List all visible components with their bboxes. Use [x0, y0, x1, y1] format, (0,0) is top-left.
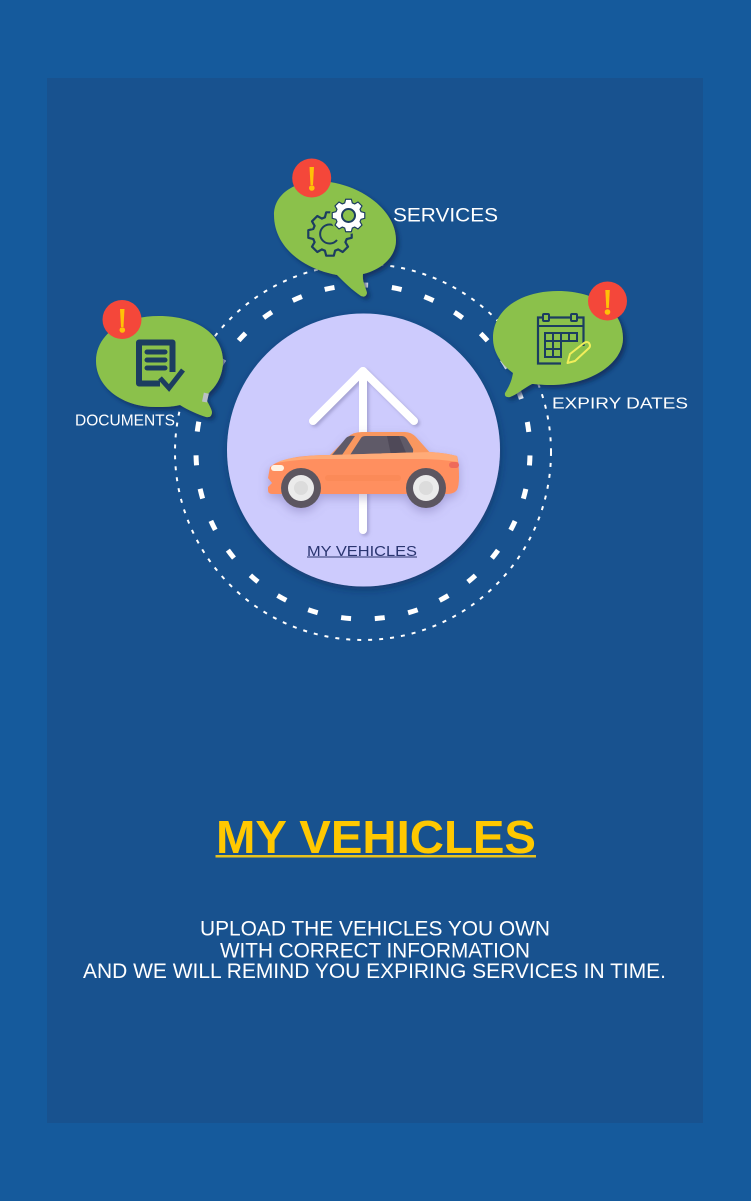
alert badge: [588, 282, 627, 320]
label: expiry dates: EXPIRY DATES: [552, 396, 688, 412]
label: my vehicles small: MY VEHICLES: [307, 544, 417, 560]
alert badge: [102, 300, 142, 339]
small grey fragment: [202, 393, 209, 403]
dotted outer ring: [175, 264, 551, 640]
central circle: my vehicles: [227, 314, 500, 586]
bubble: services: [274, 158, 396, 297]
rear wheel: [406, 468, 446, 508]
icon: upward arrow: [313, 371, 414, 530]
icon: document with check: [139, 342, 183, 388]
front wheel: [281, 468, 321, 508]
bubble: expiry dates: [493, 282, 627, 397]
description text: WITH CORRECT INFORMATION: [220, 940, 530, 962]
description text: [83, 918, 666, 983]
alert badge: [292, 158, 331, 198]
label: documents: DOCUMENTS: [75, 412, 175, 430]
description text: AND WE WILL REMIND YOU EXPIRING SERVICES IN TIME.: [83, 960, 666, 983]
bubble: documents: [96, 300, 223, 417]
icon: gears: [308, 197, 367, 256]
icon: calendar with pencil: [538, 314, 590, 364]
dashed inner ring: [196, 285, 530, 619]
background panel: [47, 78, 703, 1123]
label: services: SERVICES: [393, 206, 498, 226]
icon: orange car: [268, 432, 459, 508]
description text: UPLOAD THE VEHICLES YOU OWN: [200, 918, 550, 940]
title: MY VEHICLES: [216, 811, 536, 863]
